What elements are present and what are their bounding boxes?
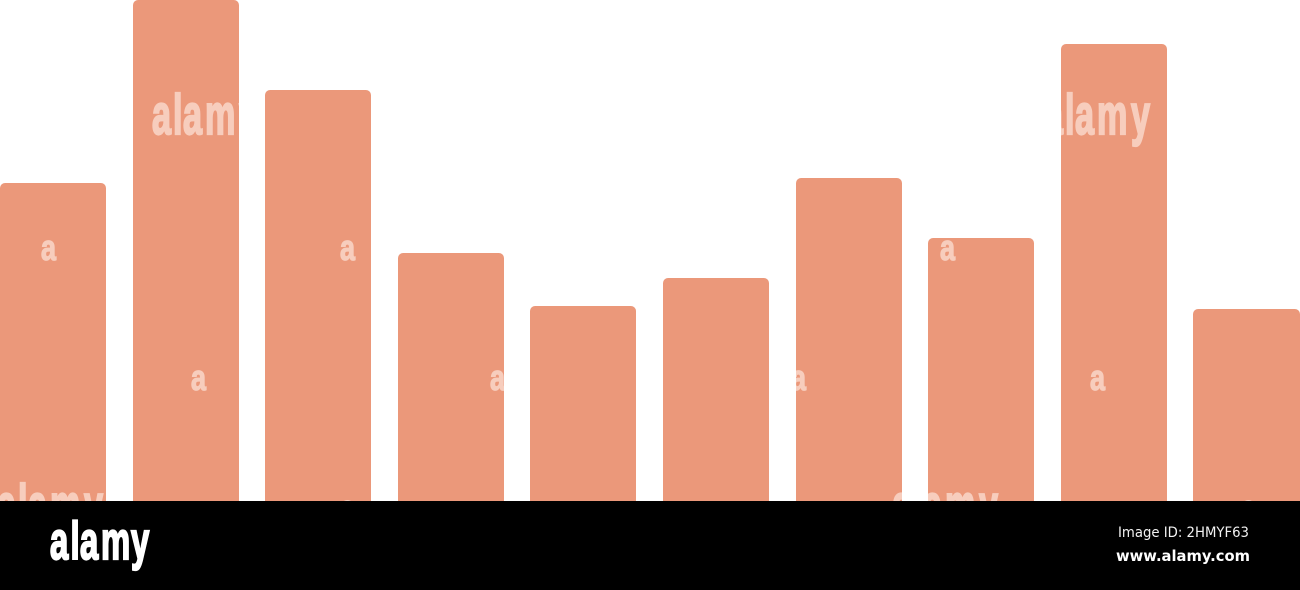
bar 9 [1061, 44, 1167, 513]
watermark: bar 4 letter: a [490, 357, 506, 398]
footer logo: alamy [50, 512, 150, 571]
watermark: bar 2: alamy [152, 82, 258, 146]
bar 5 [530, 306, 636, 513]
bar 8 [928, 238, 1034, 513]
bar 7 [796, 178, 902, 513]
bar 6 [663, 278, 769, 513]
watermark: bar 3 letter: a [340, 227, 356, 268]
bar 4 [398, 253, 504, 513]
bar 2 [133, 0, 239, 513]
watermark: bar 9: alamy [1044, 82, 1150, 146]
watermark: bar 1 bottom: alamy [0, 472, 103, 536]
bar 1 [0, 183, 106, 513]
watermarks [0, 92, 1252, 501]
website: www.alamy.com [1116, 547, 1250, 565]
watermark: bar 2 lower letter: a [191, 357, 207, 398]
footer band [0, 501, 1300, 590]
bar 10 [1193, 309, 1300, 513]
watermark: bar 3 bottom letter: a [340, 487, 356, 528]
watermark: bar 10 bottom letter: a [1241, 487, 1257, 528]
watermark: bar 8 letter: a [940, 227, 956, 268]
watermark: bar 9 lower letter: a [1090, 357, 1106, 398]
bar 3 [265, 90, 371, 513]
watermark: bar 7 letter: a [791, 357, 807, 398]
watermark: bar 7 and 8 bottom: alamy [892, 472, 998, 536]
image id: Image ID: 2HMYF63 [1118, 525, 1249, 541]
watermark: bar 1 letter: a [41, 227, 57, 268]
